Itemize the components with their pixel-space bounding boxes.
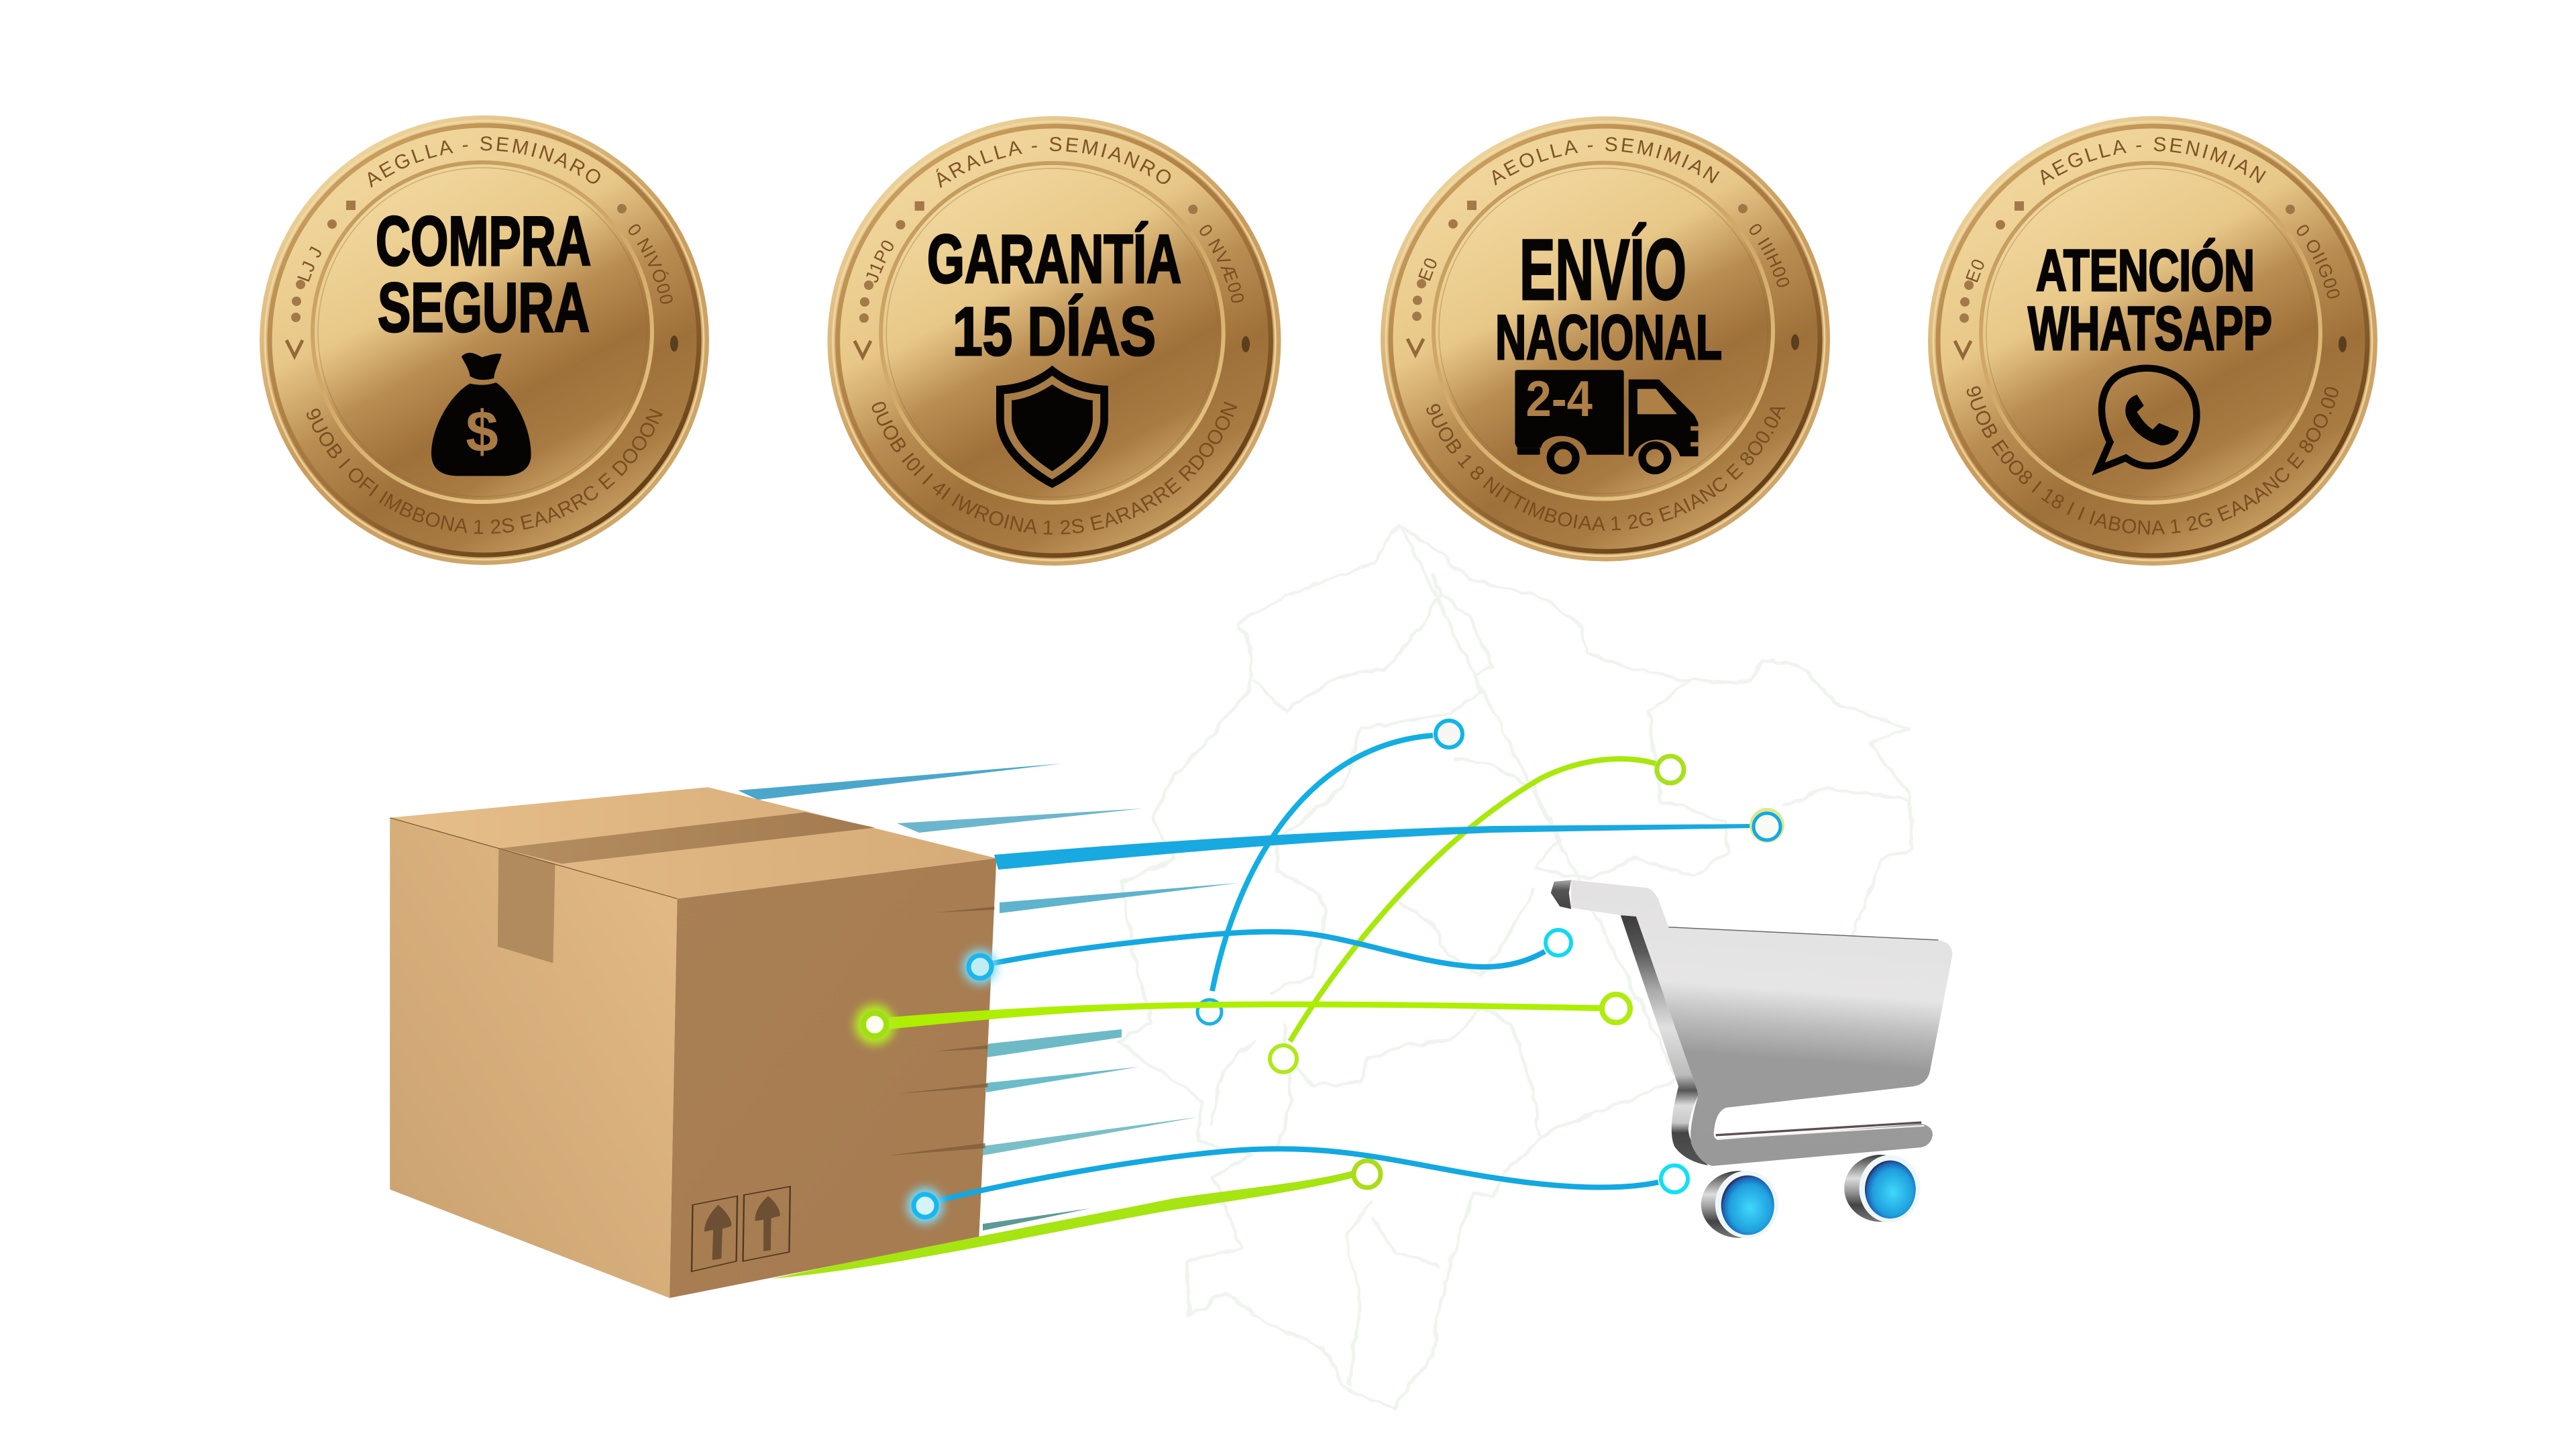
cart side strip — [1621, 915, 1708, 1165]
coin rim inscription: 0 IIIH00 — [1750, 224, 1790, 287]
cardboard box — [390, 787, 996, 1298]
cart front wheel — [1844, 1155, 1920, 1223]
coin rim inscription: AEGLLA - SEMINARO — [368, 136, 600, 188]
coin: Atención WhatsApp — [1928, 116, 2377, 566]
heading: ATENCIÓN — [2036, 238, 2255, 303]
box left face — [390, 818, 678, 1298]
cart edge highlights — [1668, 927, 1938, 1139]
heading: 15 DÍAS — [953, 293, 1156, 370]
cart rear wheel — [1701, 1171, 1778, 1238]
coin rim inscription: 0 NIVÓ00 — [629, 224, 673, 304]
coin rim inscription — [866, 137, 1244, 535]
cart body — [1571, 880, 1952, 1166]
map outline of Ecuador — [1118, 525, 1912, 1408]
icon: money bag — [431, 353, 531, 476]
icon: money bag: $ — [466, 399, 498, 464]
coin rim inscription: E0 — [1418, 258, 1437, 281]
heading: COMPRA — [376, 203, 591, 280]
coin rim inscription: E0 — [1966, 260, 1984, 282]
coin rim inscription — [1966, 137, 2340, 535]
shopping cart — [1551, 880, 1952, 1238]
coin: Compra Segura — [260, 115, 709, 565]
box top face — [390, 787, 996, 898]
icon: delivery truck 2-4 days: 2-4 — [1525, 370, 1593, 427]
coin rim inscription: 9UOB 1 8 NITTIMBOIAA 1 2G EAIANC E 8O0.0A — [1426, 404, 1786, 531]
coin rim inscription — [1418, 137, 1790, 531]
lower green route under the box — [771, 1171, 1354, 1279]
coin: Garantía 15 días — [828, 116, 1281, 566]
heading: NACIONAL — [1495, 302, 1722, 372]
heading — [2028, 238, 2272, 363]
icon: delivery truck 2-4 days — [1515, 370, 1699, 470]
coin rim inscription: 9UOB E0O8 I 18 I I IABONA 1 2G EAAANC E 8OO.00 — [1967, 386, 2339, 535]
coin rim inscription: 0UOB I0I I 4I IWROINA 1 2S EARARRE RDOOON — [872, 401, 1237, 535]
coin rim inscription: J1P0 — [866, 240, 894, 283]
heading: SEGURA — [378, 269, 590, 347]
heading — [1495, 222, 1722, 372]
cart handle end — [1551, 880, 1571, 909]
handling icons: this way up — [692, 1186, 790, 1271]
coin: Envío Nacional — [1381, 116, 1830, 562]
heading — [927, 221, 1181, 370]
heading: GARANTÍA — [927, 221, 1181, 297]
icon: shield — [996, 366, 1108, 488]
coin rim inscription — [297, 136, 673, 534]
coin rim inscription: LJ J — [297, 246, 321, 282]
coin rim inscription: 0 NVÆ00 — [1199, 225, 1244, 303]
heading: WHATSAPP — [2028, 295, 2272, 363]
coin rim inscription: AEOLLA - SEMIMIAN — [1492, 137, 1720, 185]
heading: ENVÍO — [1519, 222, 1686, 318]
main blue route to far node — [994, 808, 1784, 870]
coin rim inscription: 9UOB I OFI IMBBONA 1 2S EAARRC E DOOON — [307, 408, 663, 534]
icon: WhatsApp — [2098, 368, 2196, 469]
box right face — [669, 858, 996, 1298]
motion streaks behind the box — [738, 764, 1238, 1231]
coin rim inscription: 0 OIIG00 — [2297, 225, 2340, 299]
blue arc route with node — [1197, 721, 1462, 1024]
heading — [376, 203, 591, 347]
packing tape — [390, 813, 875, 963]
middle blue wave route — [963, 930, 1571, 984]
lower blue wave route — [907, 1149, 1688, 1224]
lower green route node — [1354, 1161, 1381, 1188]
coin rim inscription: AEGLLA - SENIMIAN — [2041, 137, 2266, 185]
straight green route — [855, 994, 1630, 1045]
streaks on the box face — [888, 906, 994, 1155]
green arc route with node — [1270, 756, 1684, 1072]
coin rim inscription: ÁRALLA - SEMIANRO — [936, 137, 1171, 188]
